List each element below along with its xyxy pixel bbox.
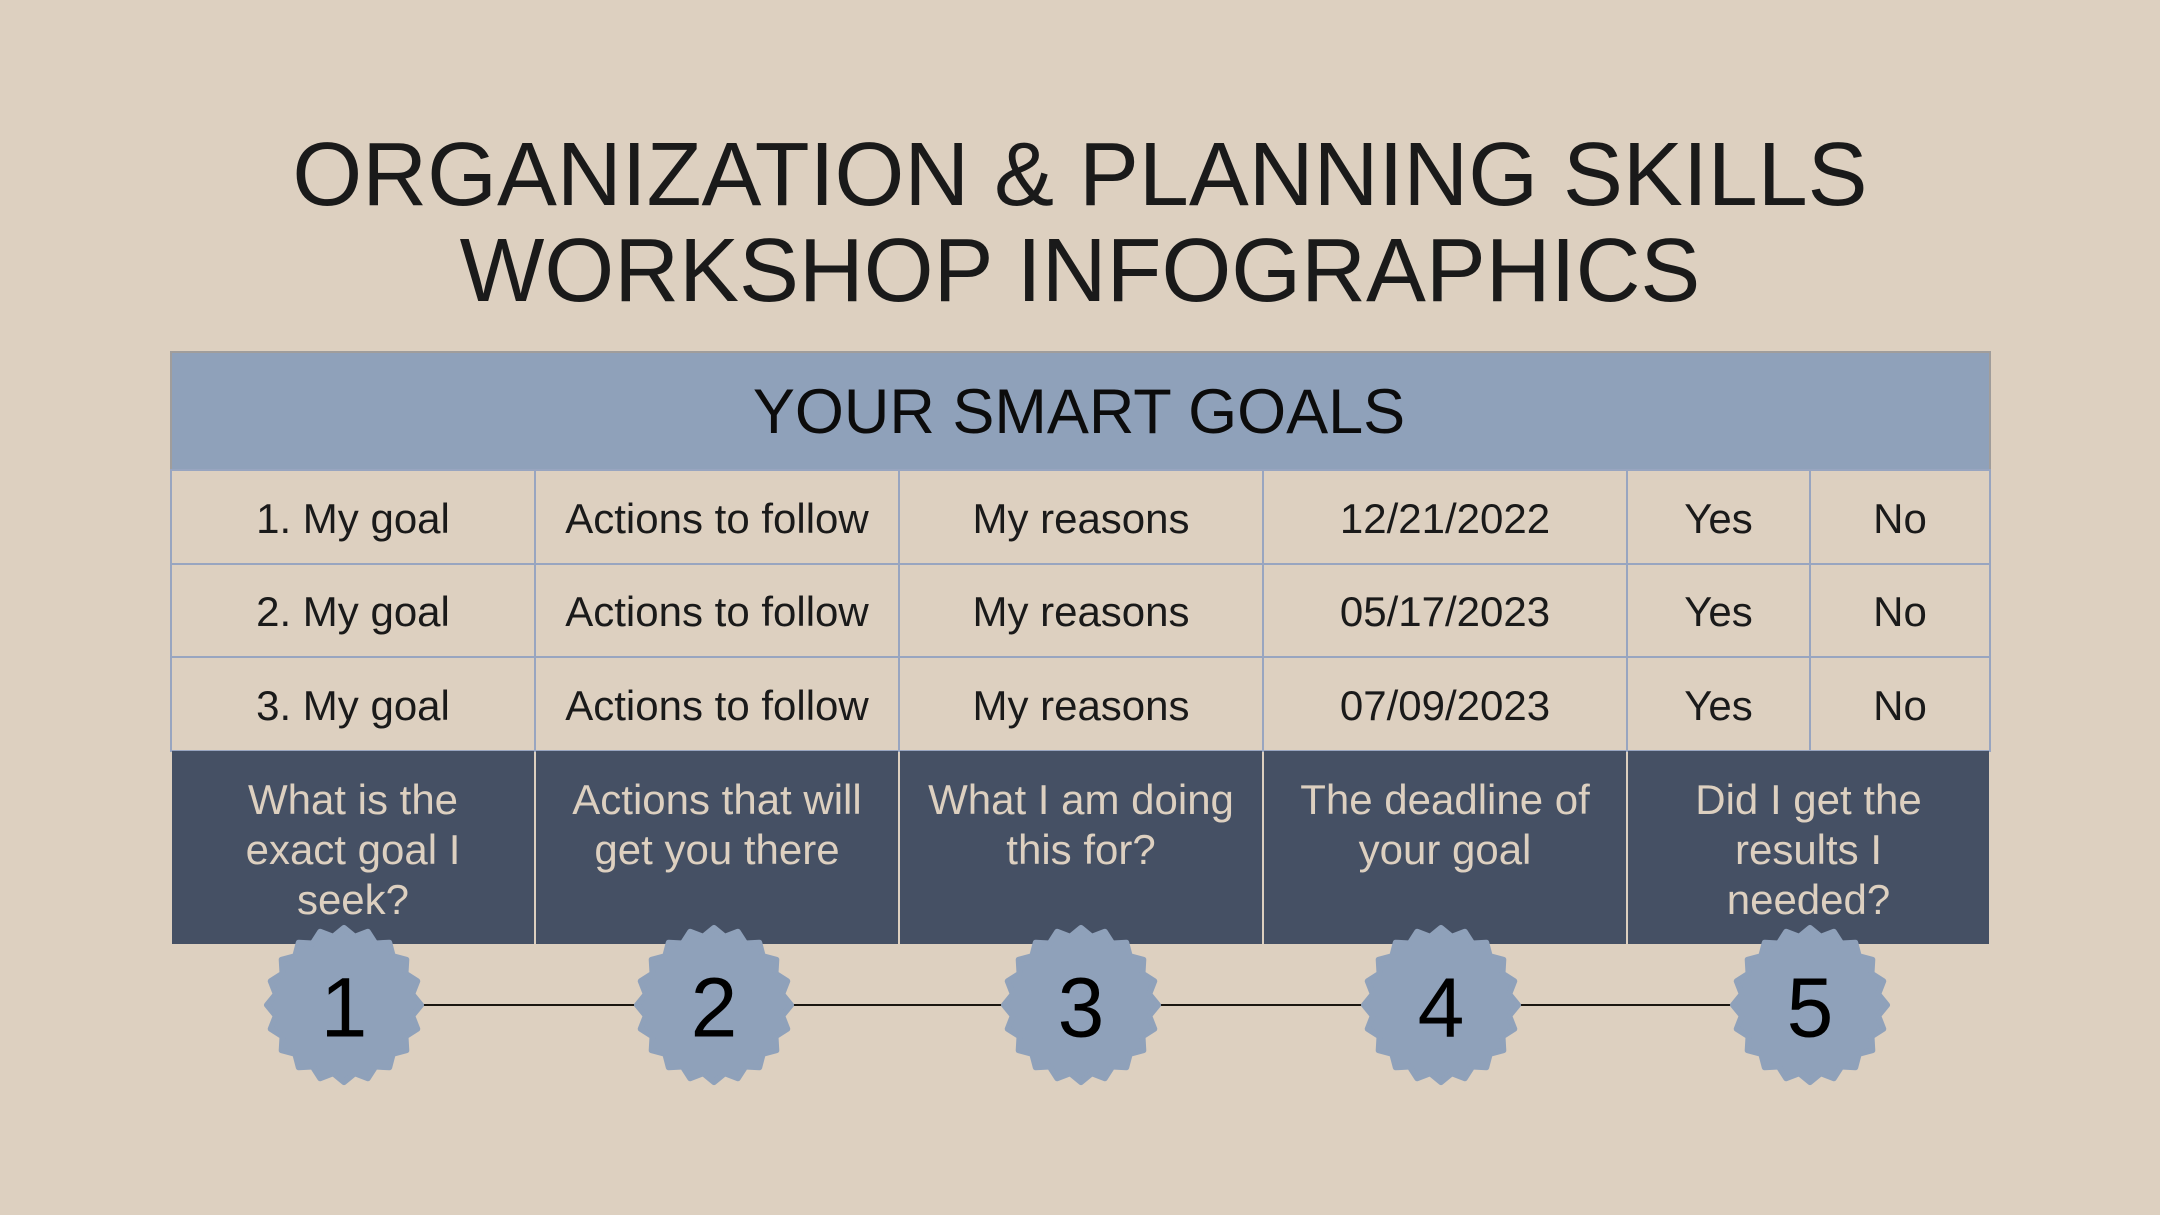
prompt: specific goal: seek? xyxy=(297,876,409,923)
row 1: actions: Actions to follow xyxy=(565,495,869,542)
row 1: yes: Yes xyxy=(1684,495,1753,542)
badge 3: 3 xyxy=(1058,960,1104,1054)
prompt: reasons xyxy=(900,751,1262,944)
row 1: reasons xyxy=(898,469,1264,564)
prompt: specific goal: exact goal I xyxy=(246,826,460,873)
title: WORKSHOP INFOGRAPHICS xyxy=(460,221,1700,321)
row 1: no xyxy=(1809,469,1991,564)
title: ORGANIZATION & PLANNING SKILLS xyxy=(292,125,1868,225)
badge 5: 5 xyxy=(1787,960,1833,1054)
badge 2: 2 xyxy=(691,960,737,1054)
row 3: goal xyxy=(170,656,536,752)
badge 2 xyxy=(637,928,791,1082)
badge 4: 4 xyxy=(1418,960,1464,1054)
badge 4 xyxy=(1364,928,1518,1082)
row 1: goal: 1. My goal xyxy=(256,495,450,542)
row 3: no: No xyxy=(1873,682,1927,729)
row 2: deadline xyxy=(1262,562,1628,658)
row 1: deadline: 12/21/2022 xyxy=(1340,495,1550,542)
row 2: yes: Yes xyxy=(1684,588,1753,635)
prompt: specific goal: What is the xyxy=(248,776,458,822)
badge 1: 1 xyxy=(321,960,367,1054)
prompt: specific goal xyxy=(172,751,534,944)
prompt: deadline: your goal xyxy=(1359,826,1531,873)
row 1: yes xyxy=(1626,469,1811,564)
row 1: deadline xyxy=(1262,469,1628,564)
row 3: actions xyxy=(534,656,900,752)
row 2: goal: 2. My goal xyxy=(256,588,450,635)
row 2: actions xyxy=(534,562,900,658)
row 2: yes xyxy=(1626,562,1811,658)
row 1: no: No xyxy=(1873,495,1927,542)
title xyxy=(292,125,1868,321)
row 2: reasons xyxy=(898,562,1264,658)
badge 5 xyxy=(1733,928,1887,1082)
row 3: yes: Yes xyxy=(1684,682,1753,729)
row 3: deadline: 07/09/2023 xyxy=(1340,682,1550,729)
row 3: goal: 3. My goal xyxy=(256,682,450,729)
row 3: yes xyxy=(1626,656,1811,752)
badge 1 xyxy=(267,928,421,1082)
prompt: results: results I xyxy=(1735,826,1882,873)
prompt: reasons: this for? xyxy=(1006,826,1156,873)
prompt: actions: get you there xyxy=(594,826,840,873)
prompt: deadline xyxy=(1264,751,1626,944)
row 1: goal xyxy=(170,469,536,564)
row 1: actions xyxy=(534,469,900,564)
row 2: no: No xyxy=(1873,588,1927,635)
row 3: reasons xyxy=(898,656,1264,752)
row 2: reasons: My reasons xyxy=(972,588,1190,635)
prompt: reasons: What I am doing xyxy=(928,776,1234,822)
prompt: actions xyxy=(536,751,898,944)
prompt: results: needed? xyxy=(1727,876,1890,923)
table heading: YOUR SMART GOALS xyxy=(753,377,1405,447)
row 2: actions: Actions to follow xyxy=(565,588,869,635)
row 2: no xyxy=(1809,562,1991,658)
table heading xyxy=(170,351,1991,470)
badge 3 xyxy=(1004,928,1158,1082)
connector line xyxy=(344,1004,1810,1006)
prompt: actions: Actions that will xyxy=(572,776,862,822)
row 3: actions: Actions to follow xyxy=(565,682,869,729)
row 3: no xyxy=(1809,656,1991,752)
row 3: deadline xyxy=(1262,656,1628,752)
prompt: deadline: The deadline of xyxy=(1300,776,1590,822)
prompt: results: Did I get the xyxy=(1695,776,1922,822)
row 2: goal xyxy=(170,562,536,658)
prompt: results xyxy=(1628,751,1989,944)
row 2: deadline: 05/17/2023 xyxy=(1340,588,1550,635)
row 3: reasons: My reasons xyxy=(972,682,1190,729)
row 1: reasons: My reasons xyxy=(972,495,1190,542)
